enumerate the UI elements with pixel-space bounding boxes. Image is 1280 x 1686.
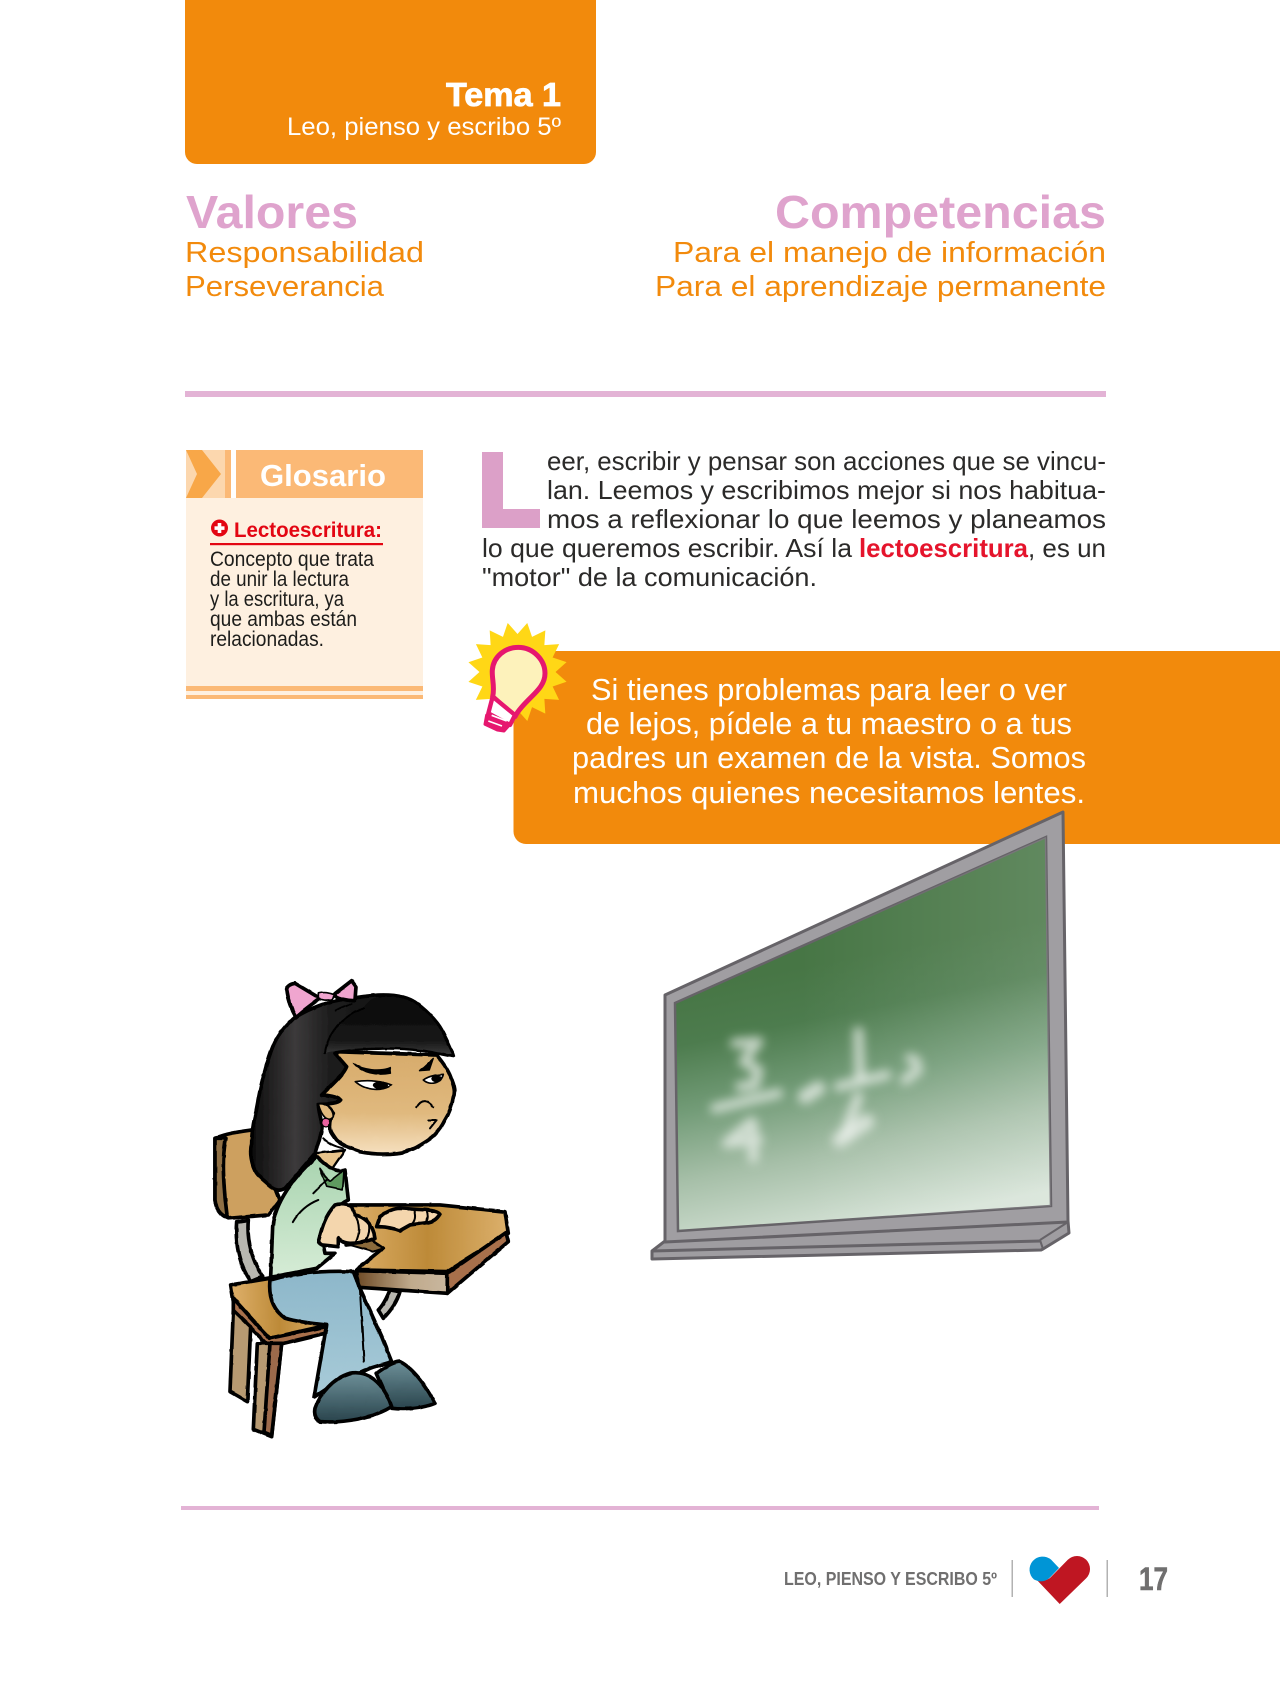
desk <box>347 1205 508 1293</box>
glossary term: Lectoescritura: <box>234 519 382 542</box>
glossary heading: Glosario <box>260 458 386 493</box>
page number: 17 <box>1139 1561 1168 1597</box>
chair <box>215 1130 400 1437</box>
header tab: Tema 1 <box>185 0 596 164</box>
panel: glossary <box>186 450 423 699</box>
intro paragraph: mos a reflexionar lo que leemos y planeamos <box>547 504 1106 534</box>
glossary definition <box>210 548 374 651</box>
illustration: blurry blackboard <box>652 812 1069 1259</box>
competencies block: Para el manejo de información <box>673 237 1106 269</box>
icon: light bulb <box>459 613 576 731</box>
shoes <box>377 1362 435 1409</box>
illustration: squinting girl at desk <box>215 981 508 1437</box>
intro paragraph: , es un <box>1028 533 1106 563</box>
chalk fraction, out of focus <box>715 1032 918 1158</box>
competencies block: Competencias <box>775 186 1106 238</box>
intro paragraph: lan. Leemos y escribimos mejor si nos habitua- <box>547 475 1106 505</box>
callout: vision advice: Si tienes problemas para leer o ver <box>591 672 1067 707</box>
icon: plus circle <box>211 520 228 536</box>
intro paragraph <box>482 446 1106 592</box>
glossary definition: de unir la lectura <box>210 568 349 591</box>
glossary definition: que ambas están <box>210 608 357 631</box>
ear and earring <box>318 1104 333 1119</box>
intro paragraph: lectoescritura <box>859 533 1029 563</box>
intro paragraph: lo que queremos escribir. Así la <box>482 533 853 563</box>
intro paragraph: "motor" de la comunicación. <box>482 562 817 592</box>
hair <box>251 995 453 1190</box>
values block: Perseverancia <box>185 271 385 303</box>
bangs <box>325 997 452 1055</box>
glossary definition: Concepto que trata <box>210 548 374 571</box>
competencies block <box>655 186 1106 303</box>
icon: heart logo <box>1030 1556 1090 1604</box>
callout: vision advice: padres un examen de la vista. Somos <box>572 740 1086 775</box>
callout: vision advice: de lejos, pídele a tu maestro o a tus <box>586 706 1072 741</box>
jeans <box>270 1271 392 1397</box>
bow <box>287 981 356 1017</box>
face <box>320 1052 454 1154</box>
values block: Responsabilidad <box>185 237 424 269</box>
shirt <box>271 1157 348 1277</box>
intro paragraph: eer, escribir y pensar son acciones que se vincu- <box>547 446 1106 476</box>
footer: book title: LEO, PIENSO Y ESCRIBO 5º <box>784 1569 997 1589</box>
callout: vision advice <box>514 651 1280 844</box>
drop cap L <box>482 452 540 528</box>
neck <box>315 1150 345 1177</box>
eyes and brows <box>323 1058 443 1148</box>
values block <box>185 186 424 303</box>
values block: Valores <box>186 186 358 238</box>
header tab: Tema 1: Leo, pienso y escribo 5º <box>287 113 561 141</box>
glossary definition: y la escritura, ya <box>210 588 344 611</box>
hands <box>318 1204 375 1247</box>
callout: vision advice: muchos quienes necesitamos lentes. <box>573 775 1085 810</box>
icon: chevron <box>186 450 221 498</box>
competencies block: Para el aprendizaje permanente <box>655 271 1106 303</box>
header tab: Tema 1: Tema 1 <box>446 76 561 113</box>
glossary definition: relacionadas. <box>210 628 324 651</box>
